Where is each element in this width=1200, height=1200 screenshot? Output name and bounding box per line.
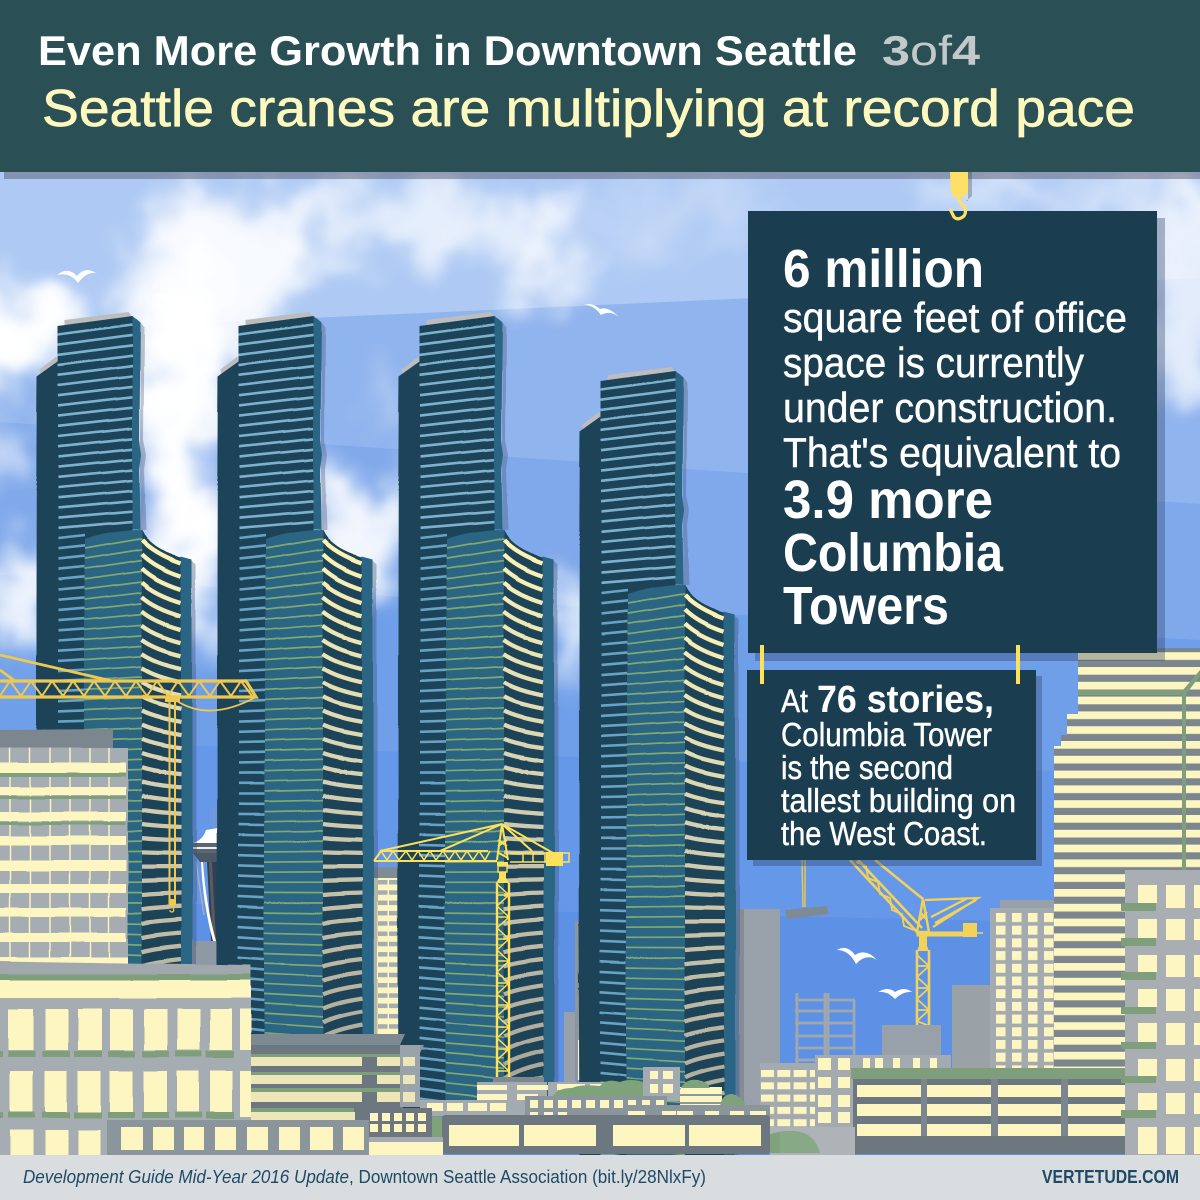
building: window tower [990, 900, 1054, 1070]
callout: 6 million square feet: Columbia [783, 523, 1004, 583]
callout: 6 million square feet [748, 211, 1165, 661]
building: low front left [107, 1120, 369, 1155]
footer [0, 1155, 1200, 1200]
crane: left [0, 655, 256, 912]
callout: 76 stories: 76 stories, [817, 679, 994, 721]
crane: right [850, 860, 983, 1026]
tower 1 [36, 312, 196, 1110]
callout: 6 million square feet: square feet of office [783, 294, 1127, 341]
building: mid low left [251, 1034, 424, 1120]
clouds [0, 173, 1200, 677]
building: behind right stepped stripes [1054, 648, 1200, 1070]
callout: 6 million square feet: 6 million [783, 239, 984, 299]
callout: 76 stories: the West Coast. [781, 815, 987, 852]
callout: 76 stories: tallest building on [781, 782, 1016, 819]
icon: Space Needle [193, 806, 218, 941]
heading: subtitle: Seattle cranes are multiplying at record pace [42, 80, 1135, 138]
callout: 6 million square feet: 3.9 more [783, 470, 993, 530]
icon: crane hook [950, 172, 972, 219]
callout: 6 million square feet: Towers [783, 576, 949, 636]
heading: series title: Even More Growth in Downtown Seattle [38, 27, 857, 74]
callout: 6 million square feet: under construction. [783, 384, 1117, 431]
callout: 76 stories: At [781, 683, 808, 719]
sign hanger rods [760, 645, 1020, 684]
tower 3 [398, 312, 558, 1110]
credit: VERTETUDE.COM [1042, 1167, 1179, 1187]
building: large front left [0, 961, 251, 1160]
source publisher: , Downtown Seattle Association (bit.ly/28NlxFy) [349, 1167, 706, 1187]
source citation: Development Guide Mid-Year 2016 Update [23, 1167, 349, 1187]
crane load: hanging slab [785, 860, 829, 919]
background buildings [192, 867, 780, 1119]
tower 4 [579, 367, 739, 1165]
buildings: skyline behind right crane [760, 985, 990, 1129]
building: left tall [0, 729, 128, 966]
callout: 76 stories [747, 670, 1042, 866]
series counter: 3of4 [882, 27, 981, 74]
callout: 76 stories: is the second [781, 749, 953, 786]
building: small window grid [360, 1108, 443, 1155]
building: low horizontal right [851, 1068, 1126, 1154]
crane: center [374, 824, 569, 1077]
building: center cluster [420, 1067, 855, 1155]
building: right front [1121, 870, 1200, 1155]
callout: 6 million square feet: That's equivalent to [783, 429, 1121, 476]
callout: 76 stories: Columbia Tower [781, 716, 992, 753]
birds [57, 270, 912, 999]
header banner [0, 0, 1200, 179]
tower 2 [217, 312, 377, 1110]
callout: 6 million square feet: space is currently [783, 339, 1084, 386]
